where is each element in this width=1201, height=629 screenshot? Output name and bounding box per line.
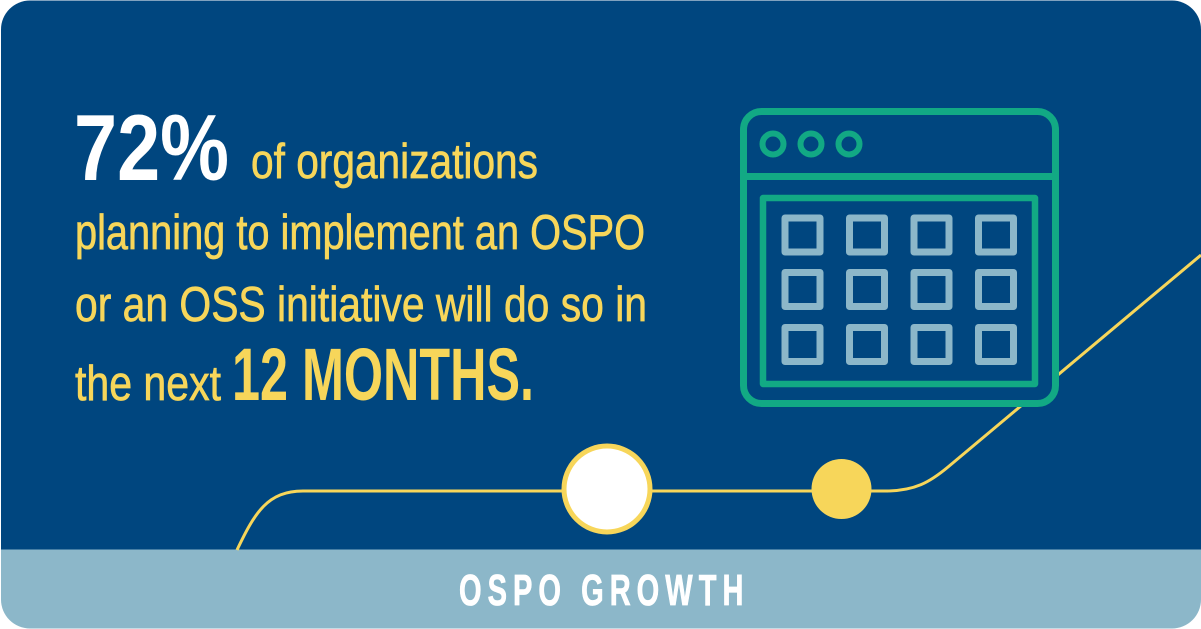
text: planning line: planning to implement an OSPO xyxy=(75,206,645,260)
text: of organizations: of organizations xyxy=(251,135,538,189)
statistic text xyxy=(74,95,647,416)
milestone: white circle xyxy=(564,446,650,532)
footer label: OSPO GROWTH xyxy=(459,565,743,614)
stat: 72%: 72% xyxy=(74,95,229,200)
growth line xyxy=(237,255,1201,550)
text: 12 MONTHS: 12 MONTHS. xyxy=(232,333,534,416)
text: the next: the next xyxy=(75,357,221,411)
milestone: yellow circle xyxy=(812,459,872,519)
text: initiative line: or an OSS initiative will do so in xyxy=(75,278,647,332)
icon: calendar window xyxy=(743,112,1056,404)
